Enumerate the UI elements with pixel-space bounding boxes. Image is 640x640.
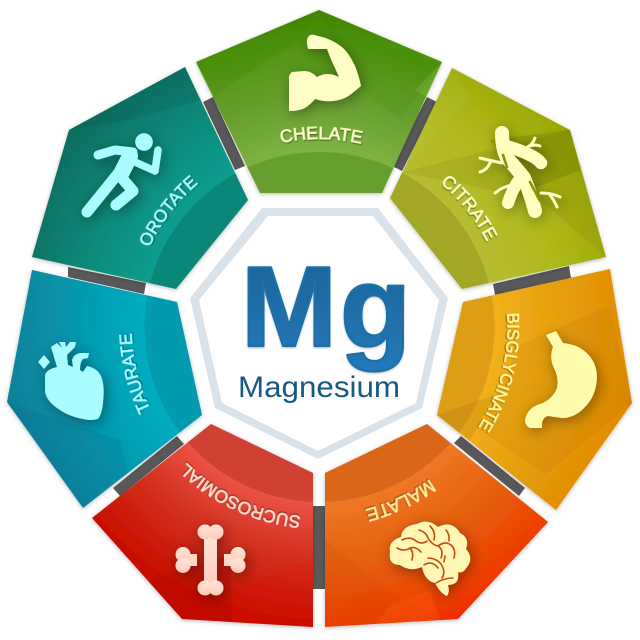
icon: brain folds <box>397 526 455 583</box>
chelate pentagon <box>196 10 442 193</box>
taurate pentagon <box>7 270 202 508</box>
connector: chelate to citrate <box>392 97 437 171</box>
orotate pentagon <box>32 67 248 289</box>
chelate facets and inner band <box>248 63 442 193</box>
taurate facets and inner band <box>65 296 202 507</box>
label: OROTATE: OROTATE <box>140 174 200 246</box>
connector: bisglycinate to malate <box>454 436 525 496</box>
badge heptagon outline <box>190 208 448 459</box>
panel: chelate <box>194 9 444 196</box>
symbol: Mg: M <box>241 244 337 371</box>
panel: citrate <box>388 68 608 292</box>
label: CITRATE: CITRATE <box>442 176 498 243</box>
symbol: Mg: g <box>340 242 411 372</box>
icon: branching veins <box>480 133 560 211</box>
connector: sucrosomial to taurate <box>113 436 184 496</box>
icon: vein slits <box>503 155 540 201</box>
citrate pentagon <box>390 68 606 289</box>
icon: running figure <box>87 133 158 212</box>
connector: taurate to orotate <box>68 267 146 294</box>
malate facets and inner band <box>325 424 450 624</box>
symbol: Mg <box>241 242 411 372</box>
name: Magnesium: Magnesium <box>238 371 400 404</box>
sucrosomial pentagon <box>92 424 313 627</box>
panel: center magnesium badge <box>190 208 448 459</box>
malate pentagon <box>325 424 548 627</box>
citrate facets and inner band <box>390 69 606 289</box>
bisglycinate pentagon <box>437 269 632 510</box>
label: BISGLYCINATE: BISGLYCINATE <box>477 313 520 434</box>
panel: bisglycinate <box>435 268 634 512</box>
icon: stomach <box>525 331 597 428</box>
label: CHELATE: CHELATE <box>280 126 364 146</box>
icon: anatomical heart <box>38 342 104 420</box>
connector: citrate to bisglycinate <box>493 266 571 295</box>
orotate facets and inner band <box>150 96 248 289</box>
panel: sucrosomial <box>91 424 316 630</box>
label: MALATE: MALATE <box>364 478 436 522</box>
panel: taurate <box>5 269 204 510</box>
label: SUCROSOMIAL: SUCROSOMIAL <box>182 461 301 528</box>
label: TAURATE: TAURATE <box>118 332 150 416</box>
icon: flexed bicep <box>289 35 361 111</box>
connector: malate to sucrosomial <box>313 506 325 589</box>
icon: crossed bones <box>176 524 246 596</box>
connector: orotate to chelate <box>203 97 245 170</box>
icon: brain <box>390 522 470 596</box>
panel: malate <box>322 424 549 630</box>
bisglycinate facets and inner band <box>437 296 540 450</box>
panel: orotate <box>30 66 250 292</box>
sucrosomial facets and inner band <box>148 424 313 622</box>
